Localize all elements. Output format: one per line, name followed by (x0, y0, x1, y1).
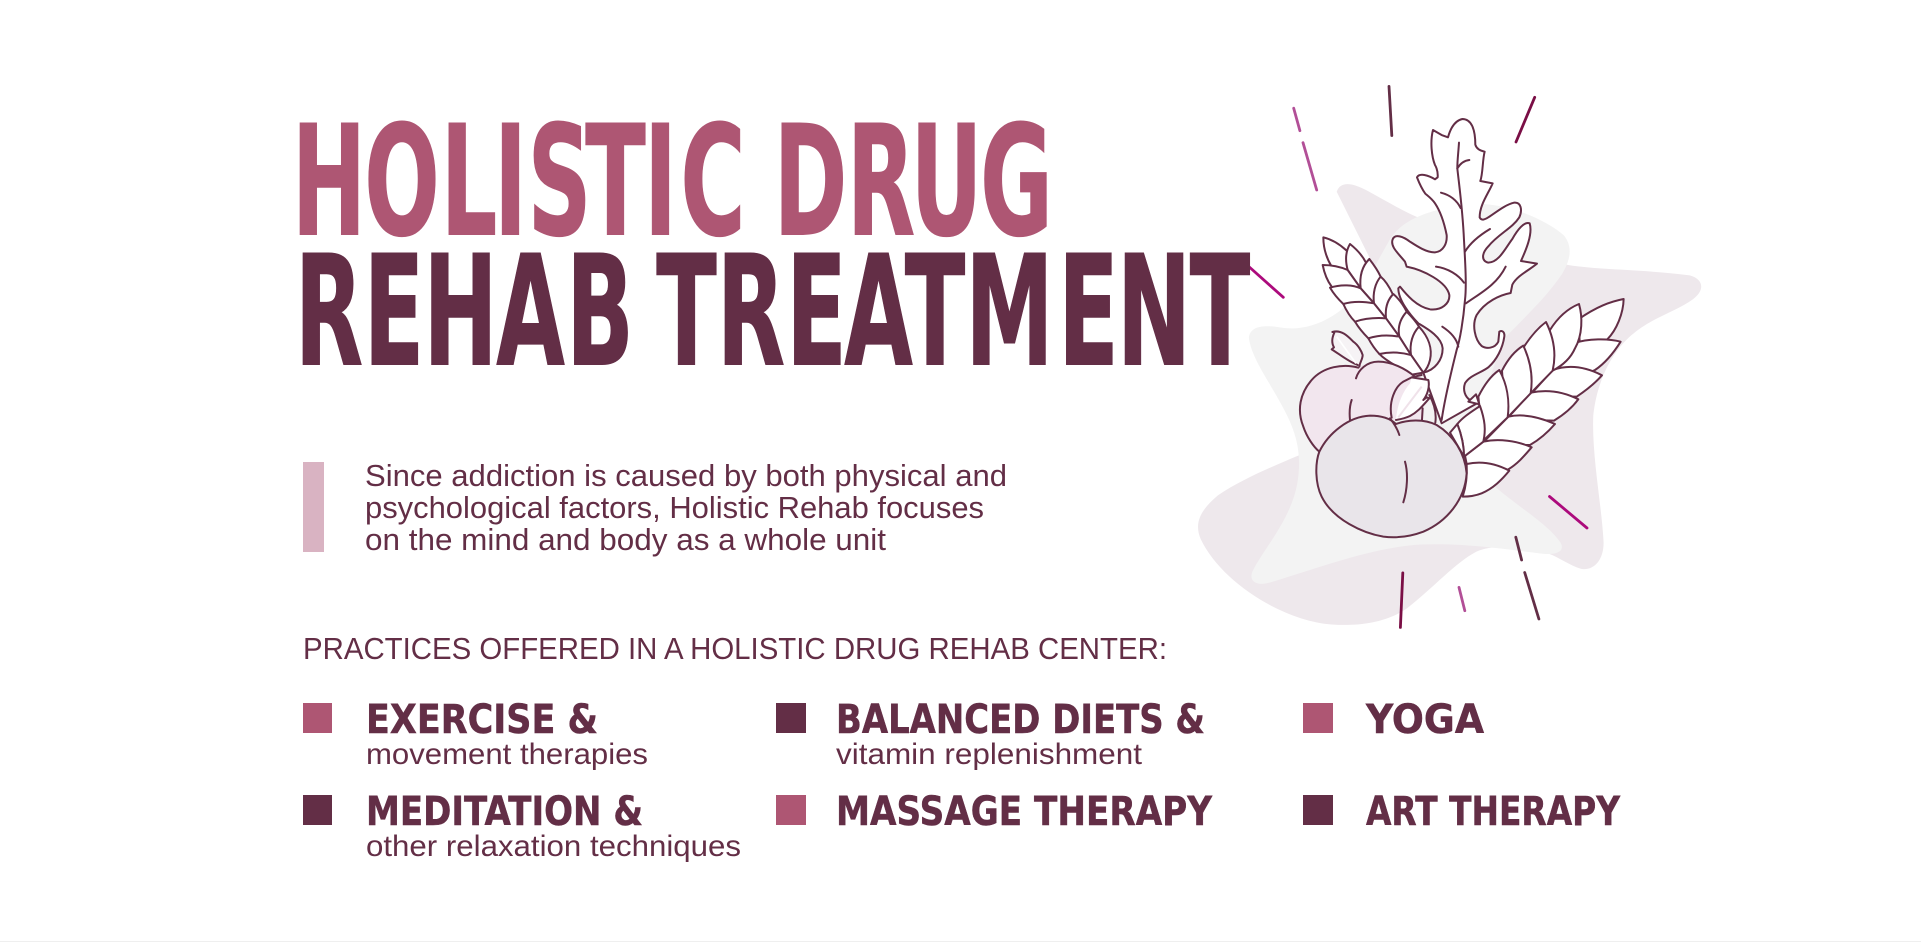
apple outline (1300, 362, 1436, 452)
background blob: light grey (1249, 204, 1570, 584)
accent bar beside intro (303, 462, 324, 552)
small leaf left (1332, 332, 1363, 367)
small leaf right (1396, 377, 1429, 420)
intro paragraph: on the mind and body as a whole unit (365, 522, 886, 557)
accent line: magenta upper left (1246, 264, 1283, 297)
list item: yoga: YOGA (1365, 697, 1484, 743)
peach (1316, 416, 1467, 537)
accent line: dark lower right, short (1516, 537, 1522, 560)
oak leaf midrib (1442, 143, 1466, 420)
icon: oak leaf (1392, 119, 1537, 423)
list item: meditation (303, 789, 741, 863)
oak leaf veins (1436, 160, 1506, 347)
illustration: botanical background blobs and accent lines (1198, 86, 1701, 627)
list item: meditation: MEDITATION & (366, 789, 643, 835)
list item: balanced diets: vitamin replenishment (836, 738, 1143, 771)
peach crease (1390, 418, 1407, 502)
list item: exercise: movement therapies (366, 738, 648, 771)
practices heading: PRACTICES OFFERED IN A HOLISTIC DRUG REHAB CENTER: (303, 632, 1167, 666)
icon: right fern branch (1450, 299, 1624, 497)
list item: art therapy: ART THERAPY (1366, 789, 1621, 835)
list item: exercise (303, 697, 648, 771)
icon: apple and peach with small leaves (1300, 331, 1467, 537)
list item: art therapy (1303, 789, 1621, 835)
accent line: light purple bottom (1459, 587, 1465, 611)
accent line: light purple top left, long (1303, 143, 1317, 190)
list item: yoga (1303, 697, 1484, 743)
intro paragraph: Since addiction is caused by both physical and (365, 458, 1007, 493)
title: line two: REHAB TREATMENT (295, 224, 1250, 401)
apple body (1300, 362, 1424, 452)
accent line: wine bottom (1400, 573, 1403, 627)
accent line: dark top (1389, 86, 1392, 136)
accent line: magenta lower right (1550, 496, 1587, 528)
accent line: light purple top left, short (1294, 108, 1300, 131)
intro paragraph (365, 458, 1007, 557)
list item: balanced diets (776, 697, 1205, 771)
list item: balanced diets: BALANCED DIETS & (836, 697, 1205, 743)
title: line one: HOLISTIC DRUG (292, 94, 1053, 271)
list item: exercise: EXERCISE & (366, 697, 598, 743)
accent line: dark lower right, long (1525, 572, 1539, 619)
intro paragraph: psychological factors, Holistic Rehab focuses (365, 490, 984, 525)
accent line: wine top right (1516, 97, 1535, 142)
list item: massage therapy: MASSAGE THERAPY (836, 789, 1213, 835)
icon: left fern branch (1323, 237, 1431, 375)
background blob: mauve (1198, 184, 1701, 625)
list item: meditation: other relaxation techniques (366, 830, 741, 863)
